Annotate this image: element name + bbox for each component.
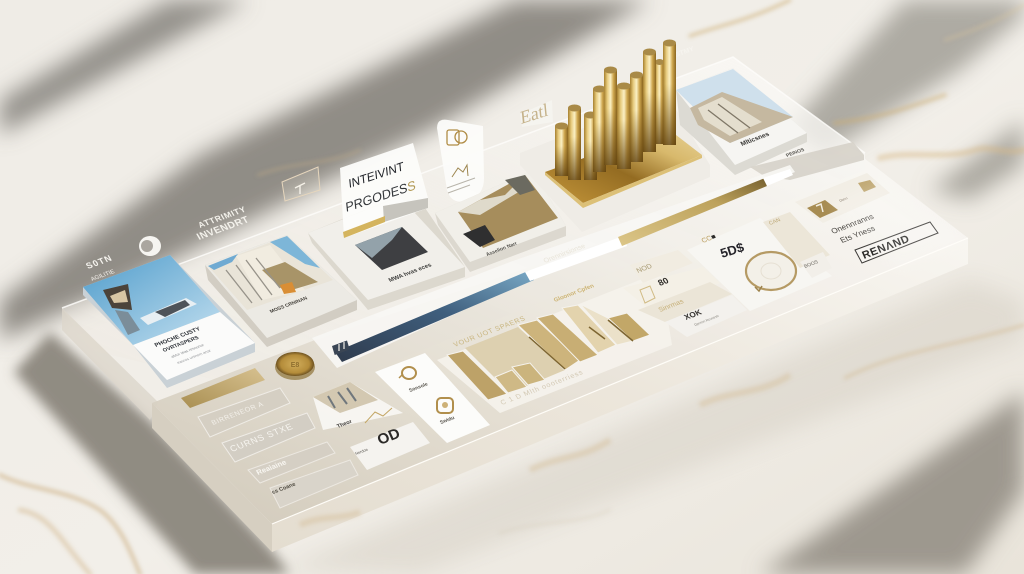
card 1: blue photo card	[83, 255, 255, 388]
cast shadow of slab	[14, 332, 290, 574]
card 5: palace photo card: Mlticsnes	[739, 131, 771, 148]
panel: photo with sketch: Theor	[336, 419, 354, 430]
card 3: dark photo card: MWA hvas eces	[388, 262, 434, 284]
panel: nod: NOD	[635, 263, 654, 275]
panel: monogram: Nerdoe	[354, 447, 370, 456]
small strip card	[750, 142, 864, 180]
glass label 2	[222, 413, 315, 462]
bar 6	[617, 82, 631, 169]
glass label 1	[198, 388, 290, 437]
icon: gold emblem	[399, 367, 416, 379]
gold ring	[745, 251, 797, 291]
light glow on right of slab	[830, 180, 965, 270]
panel: gold sketch: Sinrmas	[657, 298, 686, 314]
icon: swirl logo	[139, 236, 161, 256]
timeline bar	[312, 165, 795, 368]
panel: beige small cards: BOOS	[803, 259, 820, 270]
right text: organisation: Ets Yness	[838, 224, 877, 245]
panel: white icon column: Swidu	[439, 415, 456, 426]
card 1: blue photo card: PHOCHE CUSTY	[154, 327, 202, 349]
floating pill panel with icons	[437, 120, 484, 202]
bar chart panel	[437, 272, 672, 413]
panel: 5D$ stat with gold ring: CC■	[700, 234, 717, 245]
card 4: landscape photo card	[435, 170, 566, 272]
outlined logo box: RENΛND	[860, 233, 912, 262]
bar 3	[584, 112, 597, 180]
panel: photo with sketch	[313, 382, 403, 430]
right text: organisation: Onennranns	[829, 212, 875, 236]
gold plate	[545, 128, 702, 208]
bar 7	[630, 72, 643, 162]
platform: upper glass plate	[62, 57, 865, 420]
outlined logo box	[855, 222, 938, 263]
bars	[447, 304, 650, 400]
panel: monogram: OD	[375, 425, 403, 449]
panel: 5D$ stat with gold ring	[687, 218, 832, 311]
bar 4	[593, 86, 606, 172]
floating panel: intent process: INTEIVINT	[348, 159, 405, 191]
platform: lower marble slab	[152, 155, 968, 552]
icon: gold face	[437, 398, 453, 413]
3D gold bar chart	[520, 40, 710, 232]
panel: beige small cards	[763, 212, 832, 278]
floating label: top left	[84, 253, 116, 283]
bar 5	[604, 66, 617, 165]
gold coin: E8	[291, 362, 299, 369]
panel: white stat: Dpcron Rovcesh	[693, 314, 720, 327]
bar 9	[643, 48, 656, 152]
card 3: dark photo card	[308, 190, 465, 310]
glass label 4	[270, 460, 358, 508]
floating panel: intent process: PRGODESS	[345, 177, 417, 215]
panel: white stat	[665, 295, 747, 337]
card 4: landscape photo card: Asselion Narr	[485, 241, 519, 258]
panel: 5D$ stat with gold ring: 5D$	[718, 239, 747, 261]
gold strip	[181, 368, 265, 408]
panel: gold emblem card: Dtern	[838, 196, 849, 203]
bar 2	[568, 104, 581, 180]
glass label 3	[248, 442, 335, 483]
small strip card: PEINOS	[785, 147, 806, 159]
panel: white icon column	[375, 353, 490, 443]
glass label 4: cs Coane	[271, 482, 297, 496]
floating label: attribute inventory: ATTRIMITY	[196, 204, 248, 230]
panel: numbers: 80	[656, 276, 670, 288]
glass label 1: BIRRENEOR A	[210, 401, 265, 427]
panel: gold emblem card	[795, 173, 890, 223]
gold caption: Gloonor Cpfen	[553, 283, 596, 304]
card 2: building photo card: MOSS CRNINAN	[269, 296, 309, 315]
floating outline icon box	[282, 167, 320, 201]
chart footer: C 1 D Mlth oooterriess	[499, 369, 585, 407]
bar 1	[555, 122, 568, 176]
card 2: building photo card	[205, 235, 357, 347]
floating label: top left: S0TN	[84, 253, 114, 271]
card 5: palace photo card	[676, 68, 807, 175]
left column of glass labels	[181, 368, 358, 508]
panel: monogram	[350, 422, 430, 470]
glass label 2: CURNS STXE	[228, 421, 295, 454]
panel: white icon column: Sonsole	[408, 382, 429, 394]
card 1: blue photo card: abtor teas resource	[170, 342, 206, 359]
card 1: blue photo card: eauros uninom anar	[176, 348, 213, 365]
timeline bar: Orennirsionse	[542, 243, 587, 265]
chart title: VOUR UOT SPAERS	[452, 316, 527, 349]
gold coin	[275, 352, 315, 380]
label: chart caption: Eatl	[519, 99, 549, 128]
glass label 3: Reaiaine	[254, 458, 288, 477]
chart background	[465, 327, 565, 393]
bar 10	[663, 40, 676, 145]
floating label: attribute inventory: INVENDRT	[195, 215, 251, 243]
soft front shadow of slab	[280, 280, 1024, 574]
floating panel: intent process	[340, 143, 428, 238]
chart base	[520, 95, 710, 232]
right label near chart: STMY	[674, 46, 695, 59]
card 1: blue photo card: OVRTASPERS	[162, 335, 201, 354]
panel: beige small cards: CAN	[768, 217, 782, 227]
mid stack of small panels	[623, 250, 747, 337]
floating label: top left: AGILITIE	[90, 269, 116, 283]
panel: white stat: XOK	[682, 308, 704, 322]
bar 8	[655, 59, 664, 144]
